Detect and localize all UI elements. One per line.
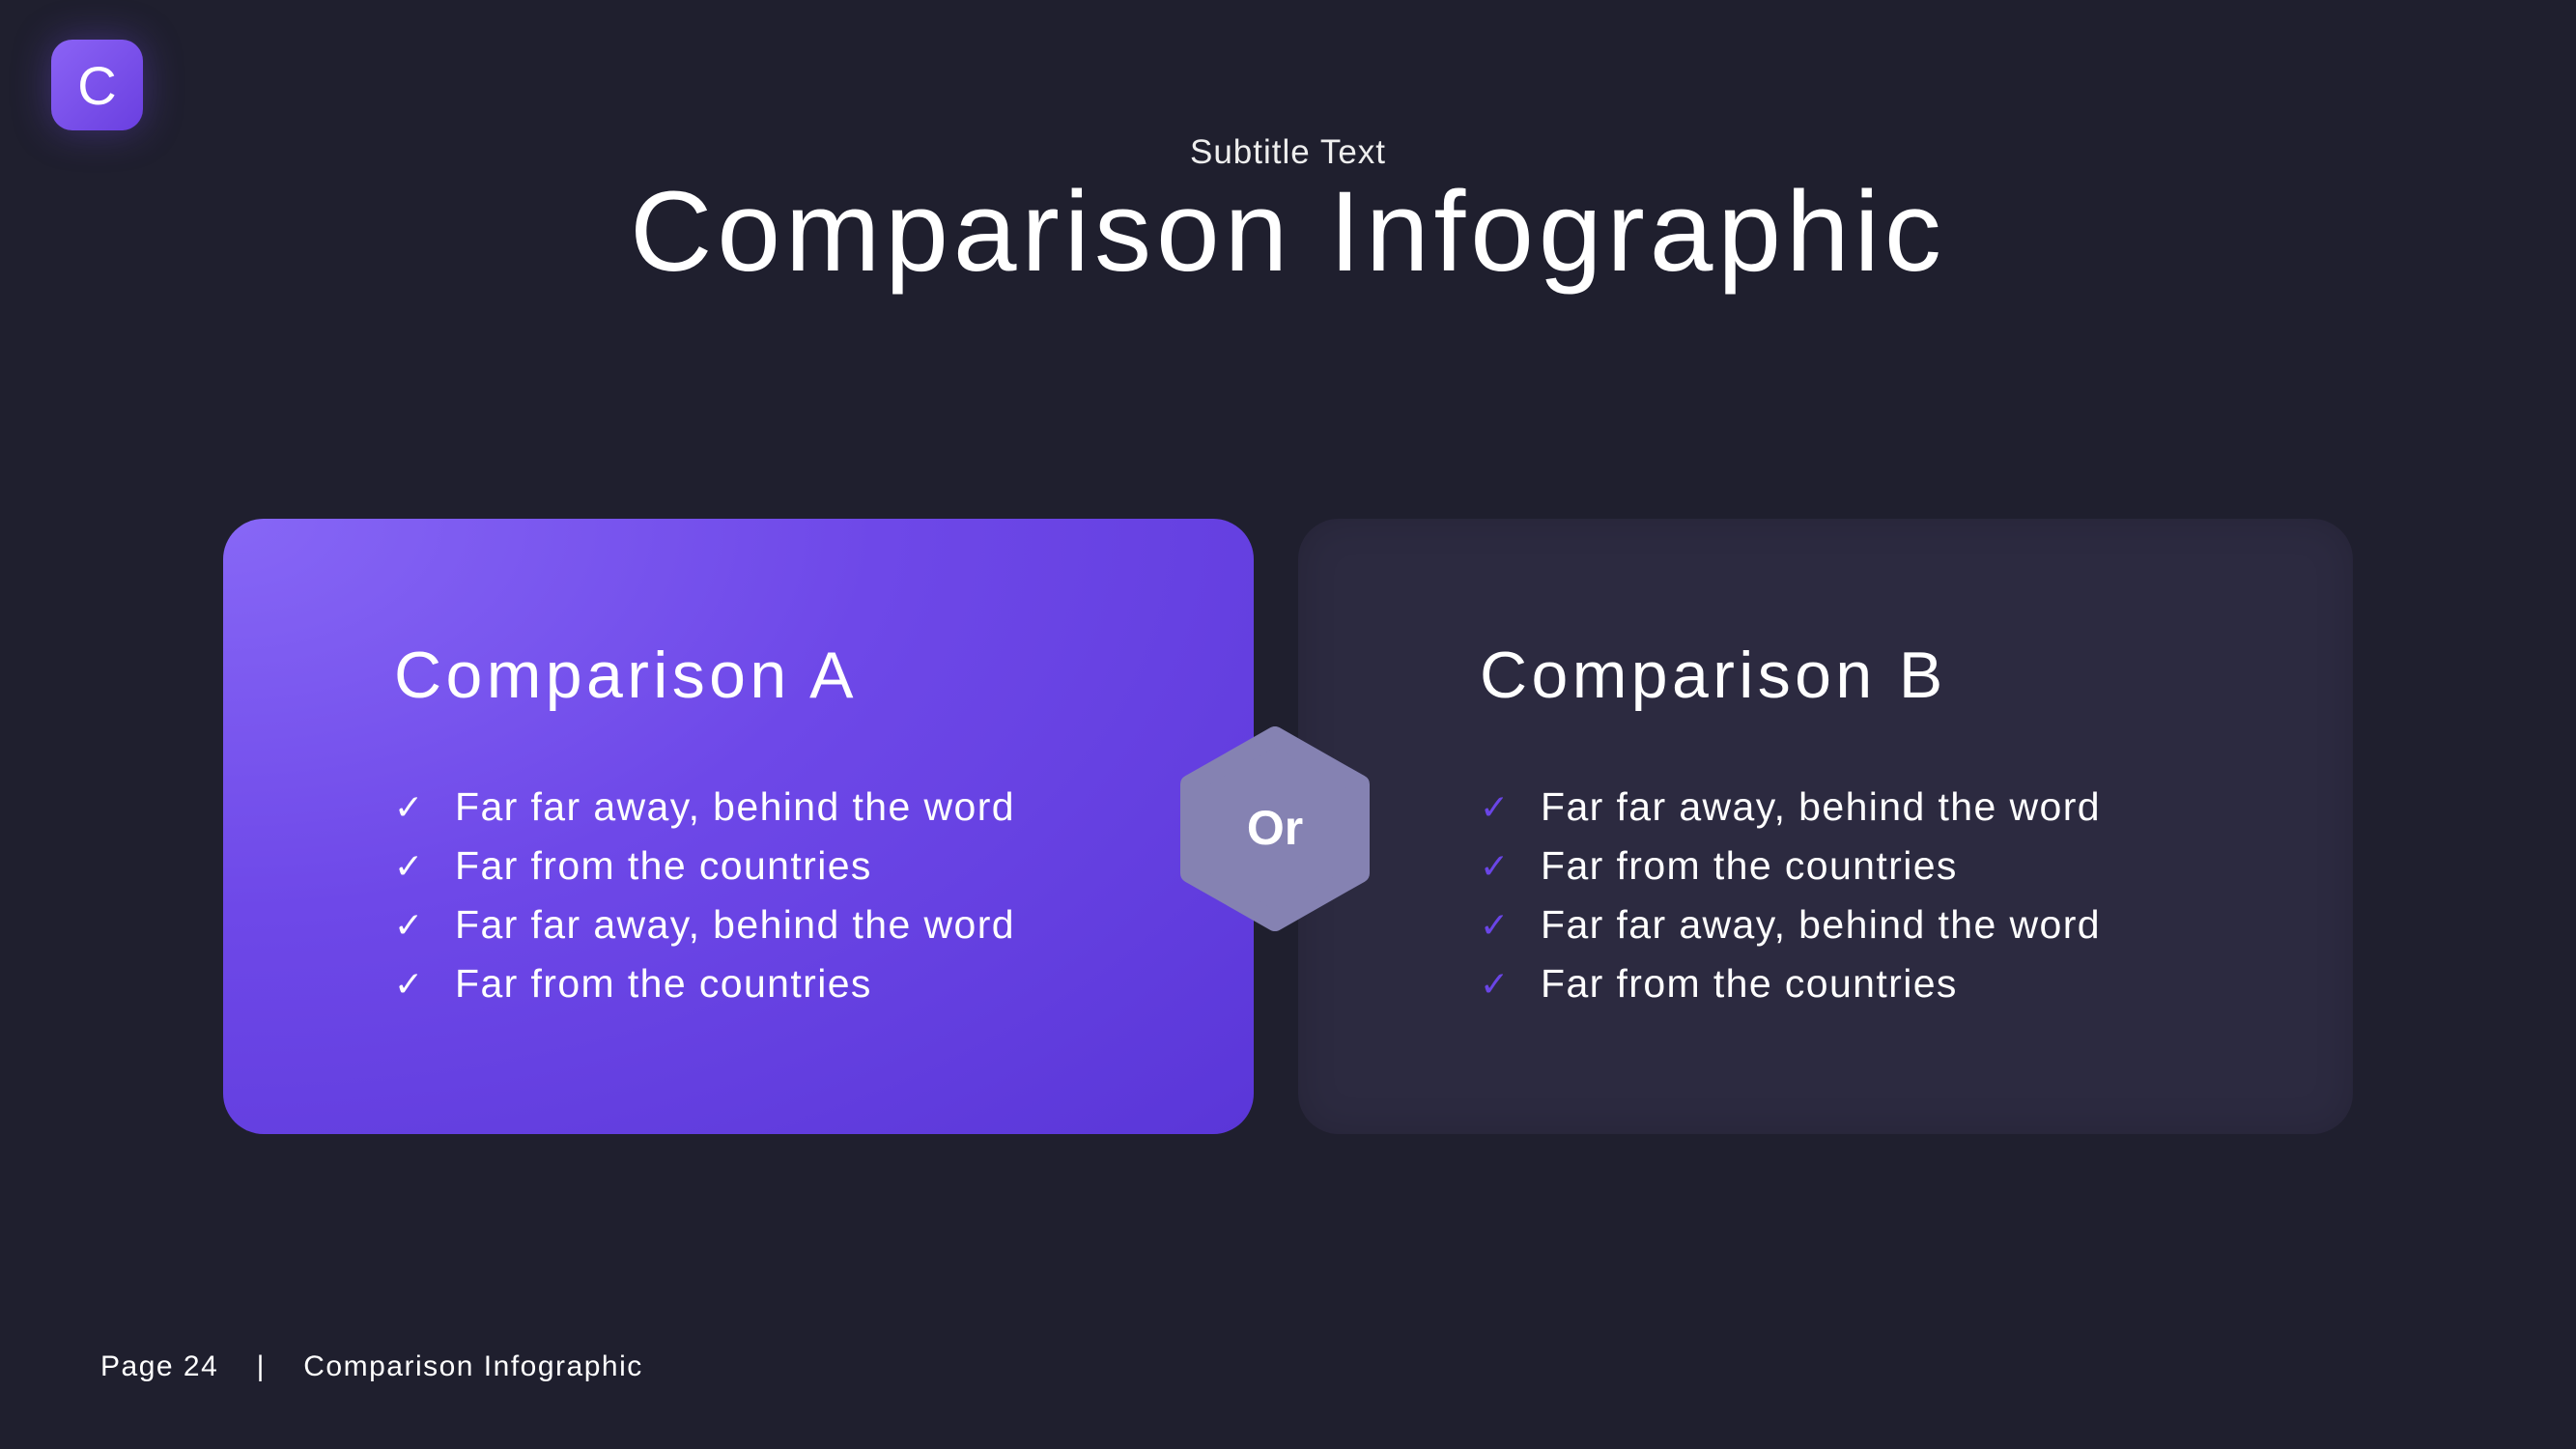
list A: ✓ <box>394 787 425 827</box>
footer: Page 24 | Comparison Infographic <box>100 1350 643 1382</box>
list A <box>394 784 1015 1006</box>
list B: ✓ <box>1480 964 1511 1004</box>
list A: Far far away, behind the word <box>455 784 1015 829</box>
hexagon: Or <box>1180 726 1370 931</box>
list B: ✓ <box>1480 787 1511 827</box>
logo <box>51 40 143 130</box>
hexagon: Or: Or <box>1247 801 1303 855</box>
list A: Far from the countries <box>455 843 872 888</box>
list A: Far far away, behind the word <box>455 902 1015 947</box>
list A: ✓ <box>394 964 425 1004</box>
logo: C <box>77 54 117 116</box>
list B: Far far away, behind the word <box>1541 902 2101 947</box>
list B: ✓ <box>1480 846 1511 886</box>
list A: ✓ <box>394 846 425 886</box>
heading B: Comparison B <box>1480 639 1947 712</box>
list A: ✓ <box>394 905 425 945</box>
list B <box>1480 784 2101 1006</box>
list B: Far from the countries <box>1541 961 1958 1006</box>
title: Comparison Infographic <box>630 168 1946 296</box>
list B: Far far away, behind the word <box>1541 784 2101 829</box>
list A: Far from the countries <box>455 961 872 1006</box>
list B: Far from the countries <box>1541 843 1958 888</box>
list B: ✓ <box>1480 905 1511 945</box>
panel: comparison B <box>1298 519 2353 1134</box>
subtitle: Subtitle Text <box>1190 133 1386 171</box>
panel: comparison A <box>223 519 1254 1134</box>
heading A: Comparison A <box>394 639 858 712</box>
